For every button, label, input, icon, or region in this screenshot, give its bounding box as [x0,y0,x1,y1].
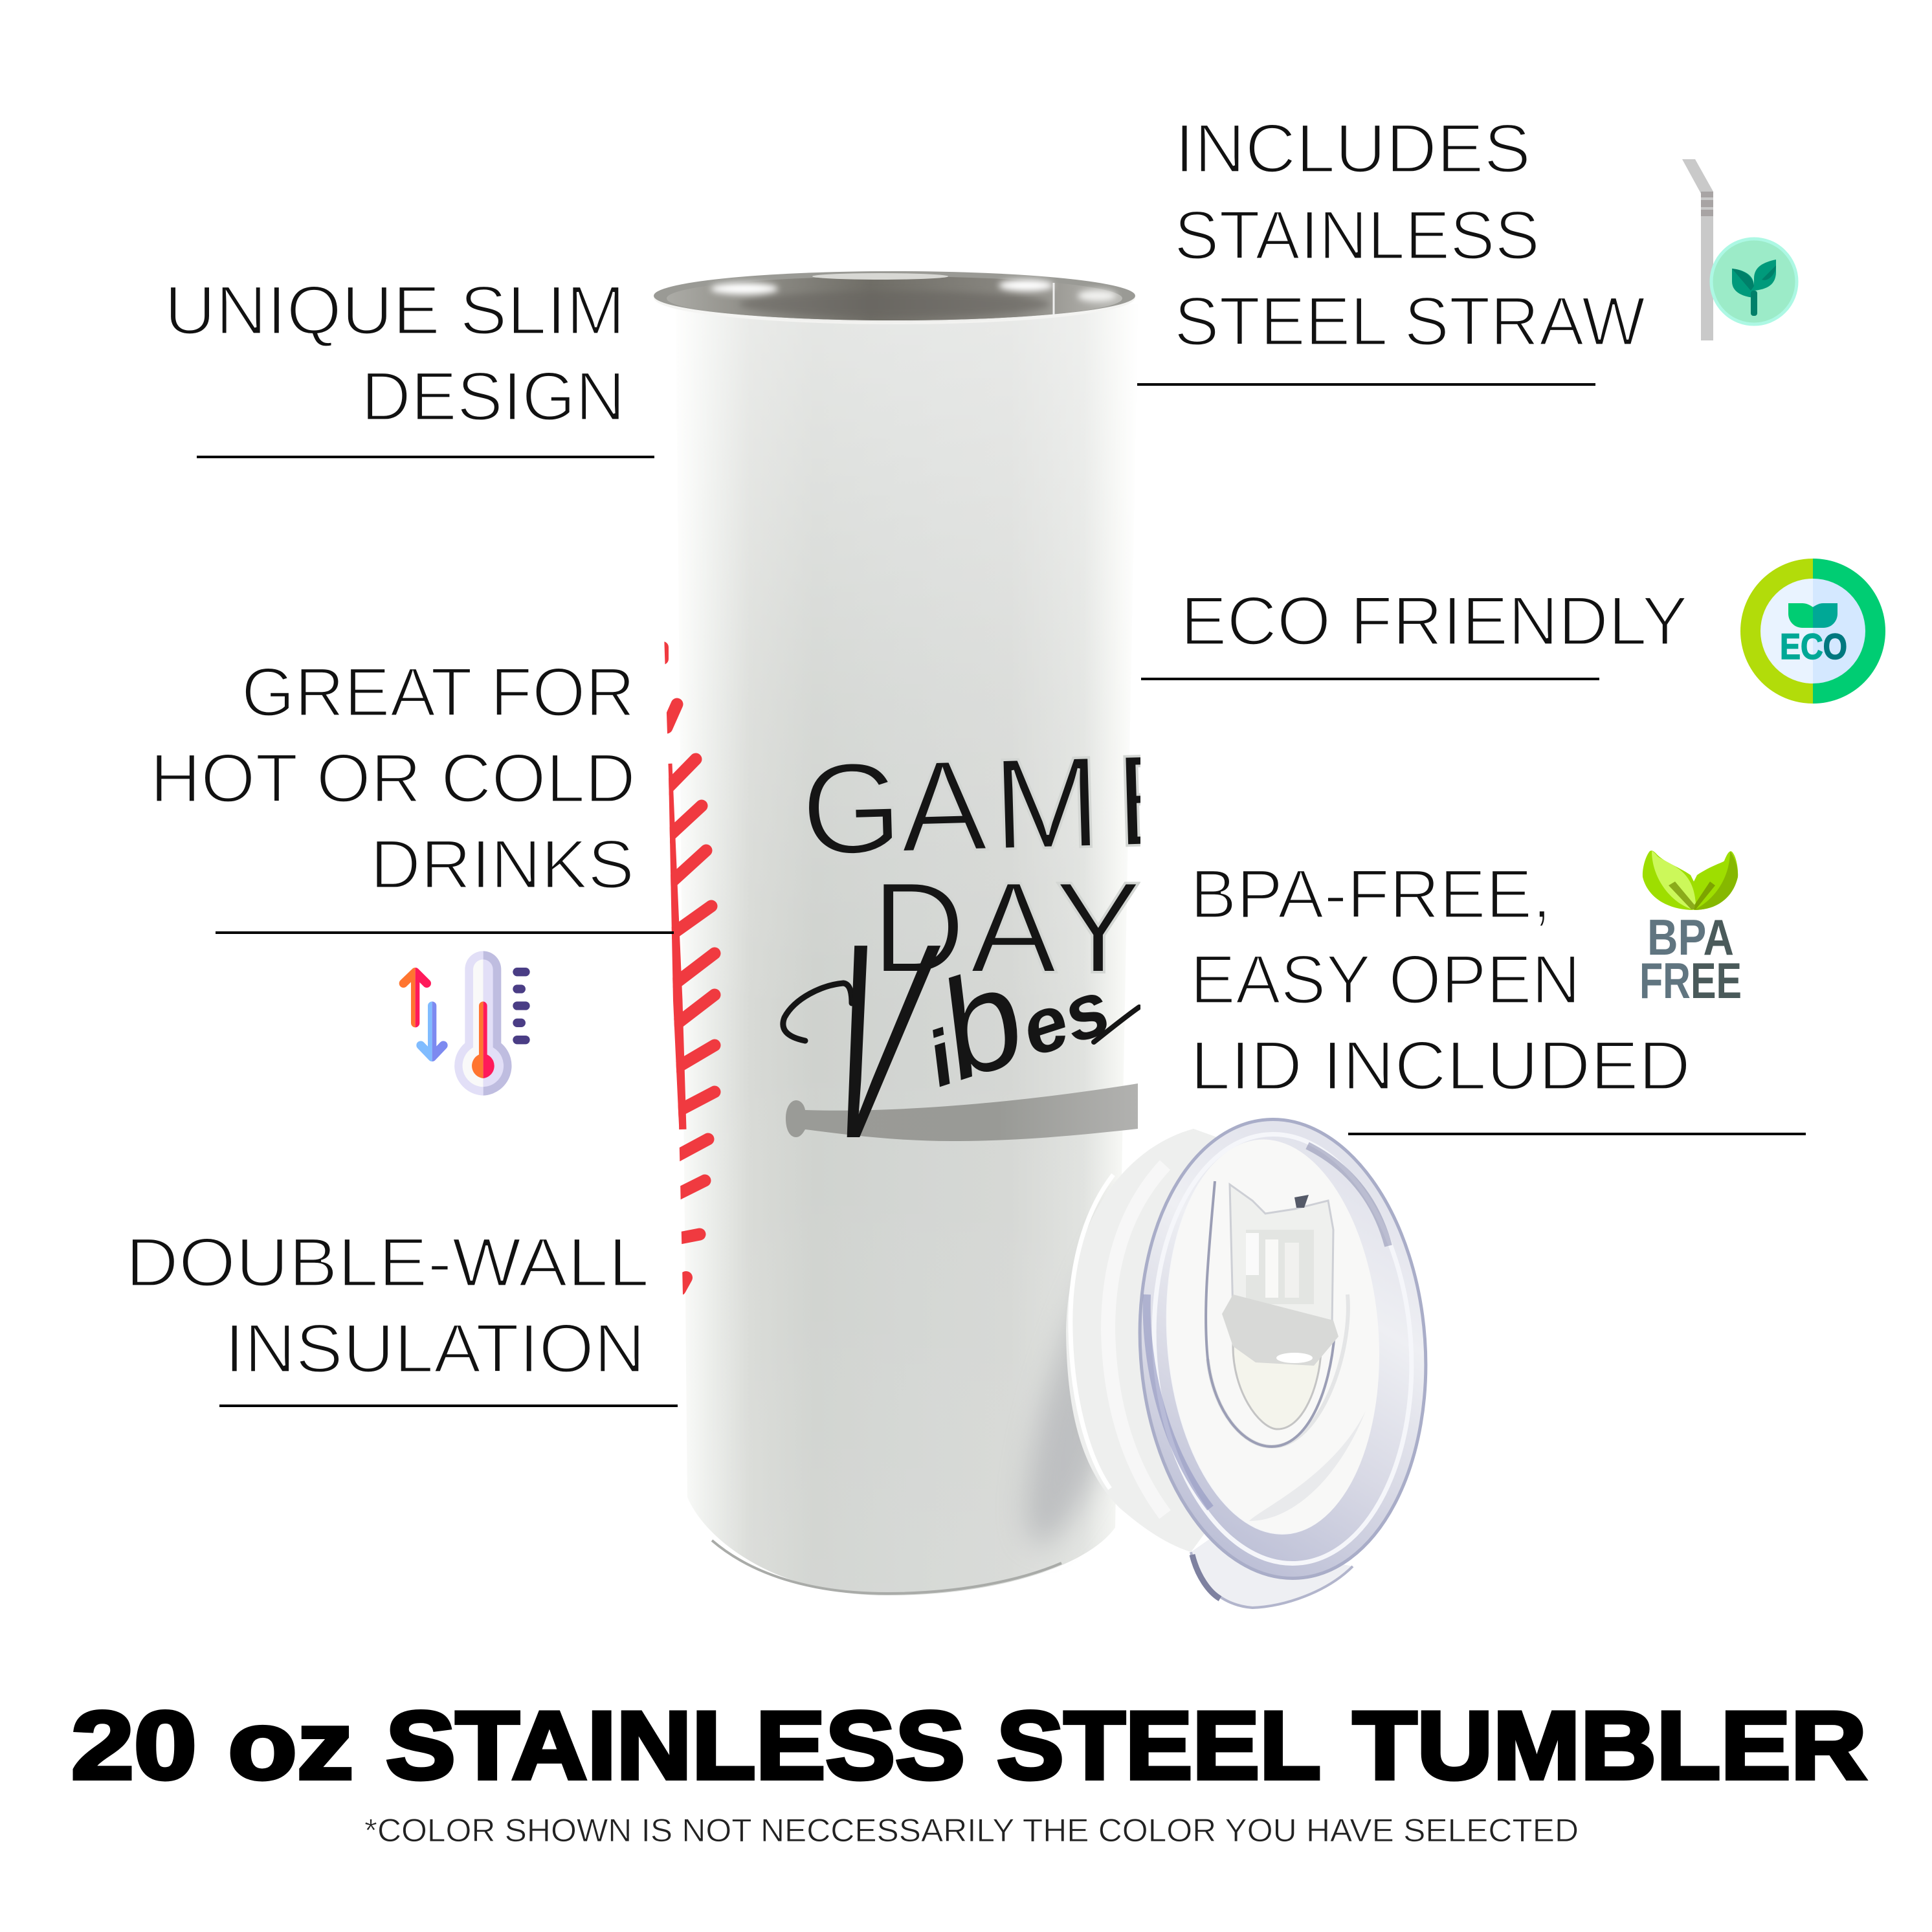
callout: hot or cold: HOT OR COLD [150,739,636,817]
lid base disc [1124,1109,1441,1589]
callout: BPA-free lid: EASY OPEN [1190,940,1581,1018]
keyhole outline [1206,1181,1335,1447]
callout: stainless steel straw: INCLUDES [1175,109,1531,187]
title: TUMBLER [1353,1691,1867,1799]
callout: stainless steel straw [1137,109,1645,386]
V script capital: V [796,885,956,1196]
ring shadow left [1147,1294,1210,1508]
callout: eco friendly: ECO FRIENDLY [1181,582,1688,660]
slider [1222,1184,1338,1366]
callout: hot or cold: GREAT FOR [241,653,635,731]
callout: unique slim design: UNIQUE SLIM [164,271,625,349]
outer ring edge [1125,1110,1441,1588]
s tail swash [1094,1007,1139,1042]
icon: sprout badge [1711,239,1797,324]
baseball bat [786,1083,1138,1141]
callout: hot or cold [150,653,674,934]
inner face [1154,1132,1392,1541]
callout: stainless steel straw: STEEL STRAW [1174,282,1645,360]
lid [1066,1109,1441,1608]
DAY: D [872,856,965,1000]
callout: hot or cold: DRINKS [370,825,634,903]
callout: unique slim design: DESIGN [361,357,625,435]
body highlight overlay [676,304,1138,1595]
disclaimer: *COLOR SHOWN IS NOT NECCESSARILY THE COLOR YOU HAVE SELECTED [364,1812,1579,1849]
keyhole inner [1233,1320,1324,1429]
tab edge [1191,1552,1353,1608]
title [71,1691,1867,1799]
DAY: A [970,856,1057,1000]
icon: straw [1682,159,1713,340]
ibes script: ibes [900,910,1124,1116]
body base edge [712,1540,1061,1593]
lid skirt [1066,1129,1294,1552]
tumbler body [676,304,1138,1595]
title: STAINLESS [386,1691,965,1799]
metal rim [654,271,1135,324]
icon: BPA free [1639,850,1742,1009]
icon: eco badge [1740,559,1885,704]
DAY: Y [1055,856,1141,1000]
baseball stitching [663,647,715,1289]
lid skirt highlight [1071,1175,1113,1489]
lid shadow on tumbler [1001,1188,1187,1557]
callout: unique slim design [164,271,654,458]
ring reflection [1140,1126,1426,1572]
skirt inner band [1108,1165,1165,1515]
callout: double-wall insulation [126,1223,678,1407]
callout: stainless steel straw: STAINLESS [1174,196,1540,274]
GAME: E [1113,727,1203,874]
title: STEEL [997,1691,1321,1799]
icon: BPA free: FREE [1639,952,1742,1009]
tumbler [654,271,1140,1595]
callout: BPA-free lid: LID INCLUDED [1190,1027,1691,1104]
tab shadow [1192,1555,1220,1599]
callout: double-wall insulation: DOUBLE-WALL [126,1223,649,1301]
icon: thermometer [403,951,530,1096]
GAME: G [799,735,904,882]
callout: double-wall insulation: INSULATION [225,1309,645,1387]
title: 20 oz [71,1691,353,1799]
pull tab [1191,1534,1353,1608]
blue ring band [1124,1109,1441,1589]
keyhole band [1208,1294,1348,1447]
tumbler print [783,727,1203,1196]
GAME: M [991,729,1103,877]
lower inner arcs [1249,1411,1366,1521]
Vibes script swash [783,983,852,1041]
GAME: A [898,733,989,880]
icon: eco badge: ECO [1780,626,1847,667]
callout: BPA-free lid [1190,855,1806,1135]
ring shadow top right [1307,1146,1388,1246]
icon: BPA free: BPA [1647,909,1734,966]
callout: BPA-free lid: BPA-FREE, [1190,855,1551,933]
